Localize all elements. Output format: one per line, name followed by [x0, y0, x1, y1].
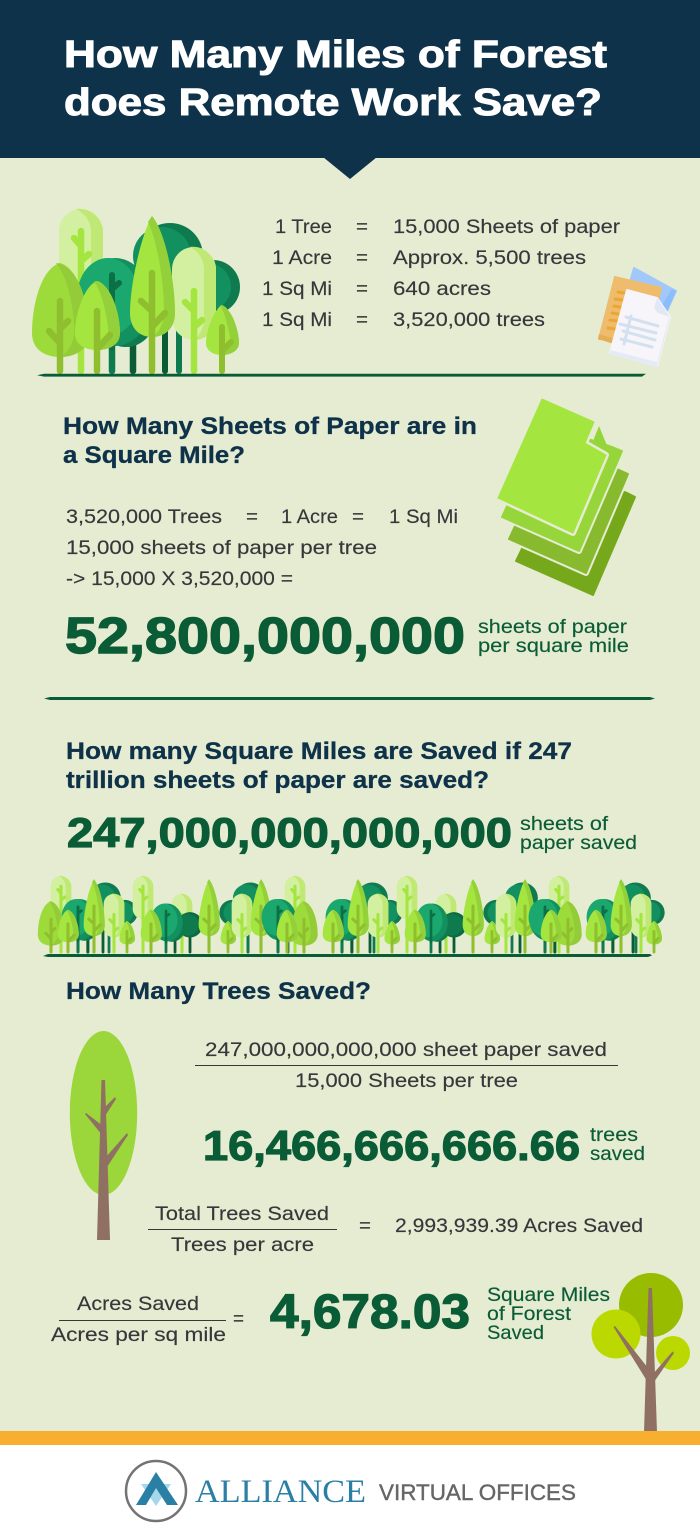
big number: square miles saved: Saved: [487, 1322, 544, 1344]
big number: square miles saved: Square Miles: [487, 1284, 610, 1306]
calculation: sheets per square mile: 1 Acre: [281, 506, 338, 528]
big number: square miles saved: [270, 1284, 610, 1344]
conversion facts table: =: [356, 216, 368, 238]
fraction: acres saved: 2,993,939.39 Acres Saved: [395, 1215, 643, 1237]
big number: sheets saved: 247,000,000,000,000: [67, 809, 512, 856]
conversion facts table: 1 Sq Mi: [262, 309, 332, 331]
heading: sheets of paper in a square mile: [63, 413, 477, 469]
illustration: forest strip: [38, 876, 665, 957]
fraction: trees saved: 15,000 Sheets per tree: [295, 1070, 518, 1092]
logo: Alliance Virtual Offices: VIRTUAL OFFICES: [379, 1480, 576, 1505]
big number: sheets per square mile: 52,800,000,000: [65, 607, 465, 664]
fraction: acres saved: =: [359, 1215, 371, 1237]
calculation: sheets per square mile: =: [246, 506, 258, 528]
orange footer bar: [0, 1431, 700, 1445]
footer panel: [0, 1445, 700, 1535]
big number: square miles saved: of Forest: [487, 1303, 572, 1325]
fraction: square miles: Acres Saved: [77, 1293, 199, 1315]
fraction: square miles: Acres per sq mile: [51, 1324, 226, 1346]
conversion facts table: 640 acres: [393, 278, 491, 300]
conversion facts table: 15,000 Sheets of paper: [393, 216, 621, 238]
big number: trees saved: saved: [590, 1143, 645, 1165]
calculation: sheets per square mile: [66, 506, 458, 590]
icon: round tree: [592, 1273, 690, 1432]
calculation: sheets per square mile: -> 15,000 X 3,520,000 =: [66, 568, 293, 590]
big number: trees saved: 16,466,666,666.66: [203, 1122, 580, 1169]
fraction: square miles: =: [233, 1308, 244, 1330]
conversion facts table: =: [356, 247, 368, 269]
conversion facts table: 1 Acre: [272, 247, 332, 269]
icon: paper stack: [498, 399, 635, 595]
fraction: acres saved: Trees per acre: [171, 1234, 314, 1256]
heading: square miles saved: [66, 738, 572, 794]
heading: how many trees saved: How Many Trees Saved?: [66, 978, 371, 1005]
conversion facts table: =: [356, 278, 368, 300]
fraction: acres saved: Total Trees Saved: [155, 1203, 329, 1225]
title: does Remote Work Save?: [64, 82, 602, 124]
heading: sheets of paper in a square mile: a Square Mile?: [63, 442, 245, 469]
title: [64, 34, 607, 124]
fraction: trees saved: 247,000,000,000,000 sheet paper saved: [205, 1039, 607, 1061]
big number: sheets saved: paper saved: [520, 832, 637, 854]
header banner: [0, 0, 700, 179]
big number: sheets per square mile: sheets of paper: [478, 616, 628, 638]
conversion facts table: 3,520,000 trees: [393, 309, 545, 331]
heading: square miles saved: How many Square Miles are Saved if 247: [66, 738, 572, 765]
conversion facts table: 1 Tree: [275, 216, 332, 238]
big number: sheets saved: sheets of: [520, 813, 609, 835]
big number: trees saved: trees: [590, 1124, 638, 1146]
fraction: acres saved: [148, 1203, 643, 1256]
conversion facts table: Approx. 5,500 trees: [393, 247, 586, 269]
heading: square miles saved: trillion sheets of paper are saved?: [66, 767, 489, 794]
fraction: square miles: [51, 1293, 244, 1346]
conversion facts table: =: [356, 309, 368, 331]
heading: sheets of paper in a square mile: How Many Sheets of Paper are in: [63, 413, 477, 440]
calculation: sheets per square mile: 3,520,000 Trees: [66, 506, 222, 528]
calculation: sheets per square mile: 15,000 sheets of paper per tree: [66, 537, 377, 559]
logo: Alliance Virtual Offices: ALLIANCE: [195, 1474, 366, 1510]
big number: square miles saved: 4,678.03: [270, 1286, 470, 1339]
conversion facts table: 1 Sq Mi: [262, 278, 332, 300]
calculation: sheets per square mile: =: [352, 506, 364, 528]
calculation: sheets per square mile: 1 Sq Mi: [389, 506, 458, 528]
big number: sheets saved: [67, 809, 637, 856]
logo: Alliance Virtual Offices: [126, 1461, 576, 1521]
illustration: tree cluster: [32, 209, 646, 377]
icon: documents: [598, 268, 676, 367]
icon: tall tree: [70, 1031, 137, 1240]
conversion facts table: [262, 216, 621, 331]
fraction: trees saved: [195, 1039, 618, 1092]
title: How Many Miles of Forest: [64, 34, 607, 76]
big number: sheets per square mile: per square mile: [478, 635, 629, 657]
big number: sheets per square mile: [65, 607, 629, 664]
